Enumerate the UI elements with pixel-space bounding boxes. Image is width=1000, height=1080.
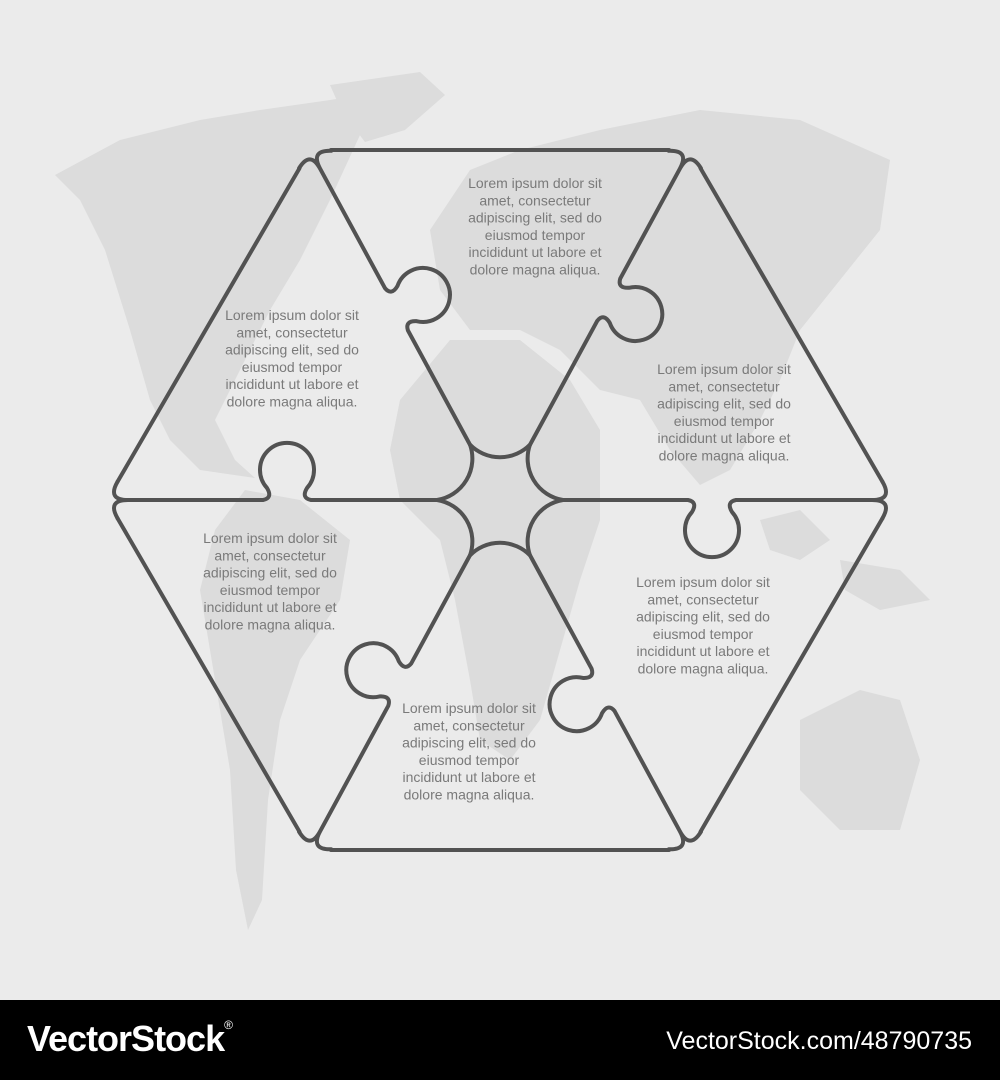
text: bottom piece: amet, consectetur [413,717,525,733]
text: upper-right piece: amet, consectetur [668,378,780,394]
text: lower-right piece: eiusmod tempor [653,626,754,642]
edge upper-right with knob [514,148,737,472]
text: upper-right piece: incididunt ut labore et [657,430,791,446]
edge upper-left with knob [297,129,520,453]
edge left with knob [114,443,437,518]
edge right with knob [563,482,886,557]
text: upper-right piece: eiusmod tempor [674,413,775,429]
text: upper-left piece: incididunt ut labore et [225,376,359,392]
text: upper-left piece: Lorem ipsum dolor sit [225,307,359,323]
world map background [55,72,930,930]
text: upper-left piece: eiusmod tempor [242,359,343,375]
text: lower-left piece: adipiscing elit, sed do [203,565,337,581]
text: top piece: Lorem ipsum dolor sit [468,175,602,191]
text: upper-left piece: amet, consectetur [236,324,348,340]
text: bottom piece: Lorem ipsum dolor sit [402,700,536,716]
outer edges [118,150,882,850]
text: bottom piece: eiusmod tempor [419,752,520,768]
edge lower-left with knob [263,528,486,852]
text: lower-right piece: adipiscing elit, sed do [636,609,770,625]
text: lower-left piece: Lorem ipsum dolor sit [203,530,337,546]
text: upper-right piece: Lorem ipsum dolor sit [657,361,791,377]
text: top piece: adipiscing elit, sed do [468,210,602,226]
text: top piece: dolore magna aliqua. [470,262,600,278]
puzzle hexagon [114,129,886,871]
text: lower-right piece: Lorem ipsum dolor sit [636,574,770,590]
text: lower-left piece: incididunt ut labore et [203,599,337,615]
text: lower-right piece: amet, consectetur [647,591,759,607]
text: bottom piece: dolore magna aliqua. [404,786,534,802]
text: upper-left piece: dolore magna aliqua. [227,394,357,410]
edge lower-right with knob [480,547,703,871]
text: top piece: eiusmod tempor [485,227,586,243]
text: upper-right piece: adipiscing elit, sed do [657,396,791,412]
text blocks [203,175,791,802]
text: lower-right piece: dolore magna aliqua. [638,660,768,676]
text: top piece: amet, consectetur [479,192,591,208]
text: lower-right piece: incididunt ut labore et [636,643,770,659]
text: bottom piece: adipiscing elit, sed do [402,735,536,751]
footer logo: VectorStock® [27,1018,232,1059]
text: bottom piece: incididunt ut labore et [402,769,536,785]
text: lower-left piece: dolore magna aliqua. [205,616,335,632]
center hole [437,445,563,555]
text: top piece: incididunt ut labore et [468,244,602,260]
footer url: VectorStock.com/48790735 [666,1027,972,1055]
text: upper-left piece: adipiscing elit, sed do [225,342,359,358]
text: lower-left piece: eiusmod tempor [220,582,321,598]
footer bar [0,1000,1000,1080]
text: lower-left piece: amet, consectetur [214,547,326,563]
text: upper-right piece: dolore magna aliqua. [659,448,789,464]
